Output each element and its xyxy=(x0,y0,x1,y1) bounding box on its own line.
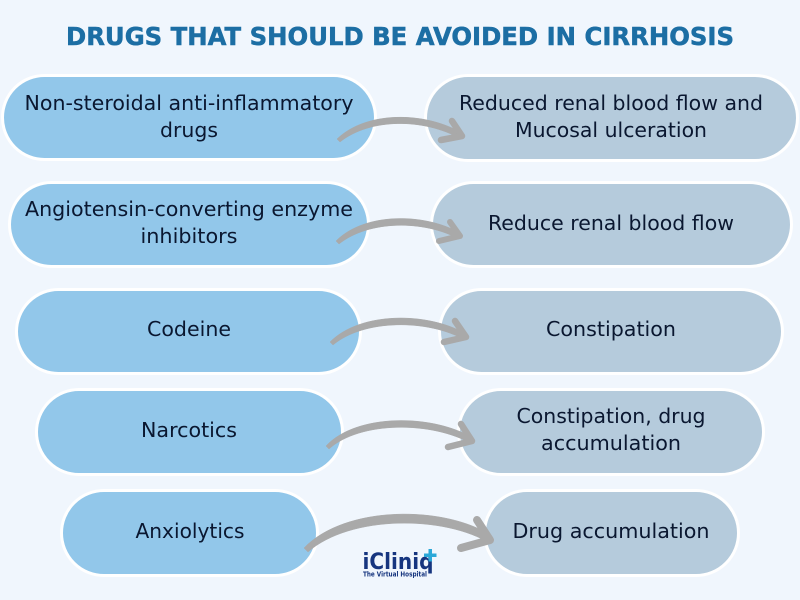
pill: Anxiolytics: Anxiolytics xyxy=(136,519,244,543)
pill: reduced renal blood flow and mucosal ulceration: Mucosal ulceration xyxy=(515,118,707,142)
pill: Codeine: Codeine xyxy=(147,317,231,341)
icon: plus xyxy=(424,549,436,562)
pill: Angiotensin-converting enzyme inhibitors: Angiotensin-converting enzyme xyxy=(25,197,353,221)
pill: Anxiolytics xyxy=(62,490,318,576)
pill: Constipation, drug accumulation xyxy=(458,390,764,474)
row 3: Codeine xyxy=(16,290,782,374)
pill: Drug accumulation: Drug accumulation xyxy=(512,519,710,543)
pill: Codeine xyxy=(16,290,360,374)
pill: Constipation xyxy=(440,290,782,374)
logo: iCliniq: iCliniq xyxy=(362,549,434,575)
arrow 5 xyxy=(304,514,492,552)
pill: Narcotics: Narcotics xyxy=(141,418,237,442)
logo: iCliniq: The Virtual Hospital xyxy=(363,570,427,578)
arrow 4 xyxy=(326,421,473,449)
pill: reduced renal blood flow and mucosal ulceration: Reduced renal blood flow and xyxy=(459,91,763,115)
arrow 1 xyxy=(337,117,462,142)
pill: Constipation, drug accumulation: Constipation, drug xyxy=(516,404,706,428)
title: DRUGS THAT SHOULD BE AVOIDED IN CIRRHOSIS xyxy=(66,22,734,51)
pill: Non-steroidal anti-inflammatory drugs: drugs xyxy=(160,118,218,142)
arrow 3 xyxy=(330,318,466,345)
pill: reduced renal blood flow and mucosal ulceration xyxy=(426,76,798,160)
row 4: Narcotics xyxy=(36,390,764,474)
pill: Angiotensin-converting enzyme inhibitors xyxy=(10,182,368,266)
pill: Non-steroidal anti-inflammatory drugs: Non-steroidal anti-inflammatory xyxy=(24,91,354,115)
pill: Constipation: Constipation xyxy=(546,317,676,341)
row 1: NSAIDs xyxy=(2,76,798,160)
arrow 2 xyxy=(336,219,460,244)
pill: reduce renal blood flow: Reduce renal blood flow xyxy=(488,211,734,235)
pill: Drug accumulation xyxy=(484,490,738,576)
pill: Angiotensin-converting enzyme inhibitors: inhibitors xyxy=(140,224,238,248)
row 2: ACE inhibitors xyxy=(10,182,792,266)
pill: Narcotics xyxy=(36,390,342,474)
pill: Non-steroidal anti-inflammatory drugs xyxy=(2,76,376,160)
pill: Constipation, drug accumulation: accumulation xyxy=(541,431,681,455)
pill: reduce renal blood flow xyxy=(432,182,792,266)
row 5: Anxiolytics xyxy=(62,490,738,576)
